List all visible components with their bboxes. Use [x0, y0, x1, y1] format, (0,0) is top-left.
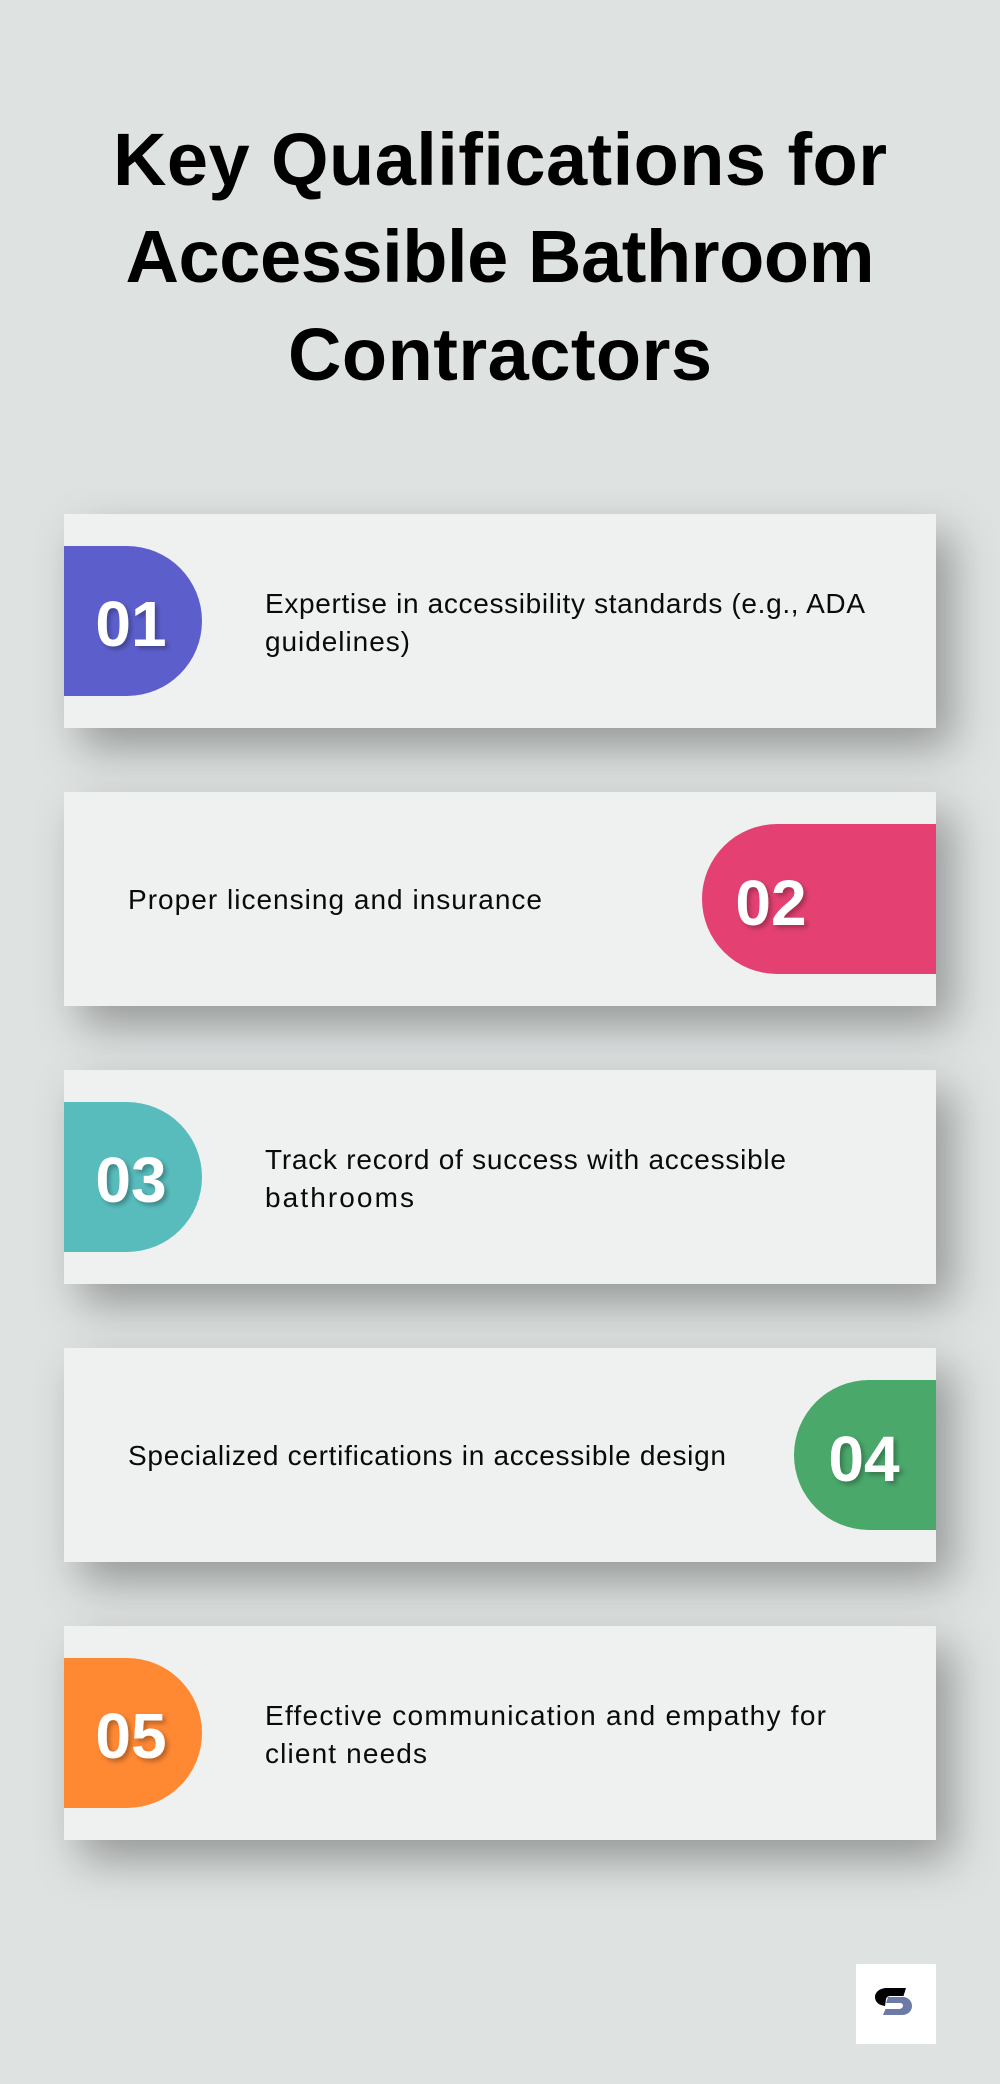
- number badge 05: [64, 1658, 202, 1808]
- number 05: 05: [95, 1700, 167, 1772]
- text: item 03: Track record of success with accessible: [265, 1144, 786, 1175]
- panel: item 05: [64, 1626, 936, 1840]
- text: item 04: Specialized certifications in accessible design: [128, 1440, 726, 1471]
- text: item 01: Expertise in accessibility standards (e.g., ADA: [265, 588, 865, 619]
- number 03: 03: [95, 1144, 167, 1216]
- title: Key Qualifications for: [113, 118, 887, 201]
- number 04: 04: [828, 1423, 900, 1495]
- text: item 01: guidelines): [265, 626, 410, 657]
- title: Accessible Bathroom: [126, 215, 874, 298]
- text: item 03: bathrooms: [265, 1182, 414, 1213]
- text: item 02: Proper licensing and insurance: [128, 884, 542, 915]
- panel: item 02: [64, 792, 936, 1006]
- text: item 05: Effective communication and empathy for: [265, 1700, 826, 1731]
- panel: item 01: [64, 514, 936, 728]
- icon: logo: [856, 1964, 936, 2044]
- number badge 01: [64, 546, 202, 696]
- title: Contractors: [288, 313, 712, 396]
- number 02: 02: [735, 867, 807, 939]
- text: item 01: [265, 588, 865, 657]
- text: item 03: [265, 1144, 786, 1213]
- panel: item 03: [64, 1070, 936, 1284]
- number 01: 01: [95, 588, 167, 660]
- number badge 03: [64, 1102, 202, 1252]
- panel: item 04: [64, 1348, 936, 1562]
- number badge 04: [794, 1380, 936, 1530]
- title: [113, 118, 887, 396]
- number badge 02: [702, 824, 936, 974]
- text: item 05: [265, 1700, 826, 1769]
- text: item 05: client needs: [265, 1738, 427, 1769]
